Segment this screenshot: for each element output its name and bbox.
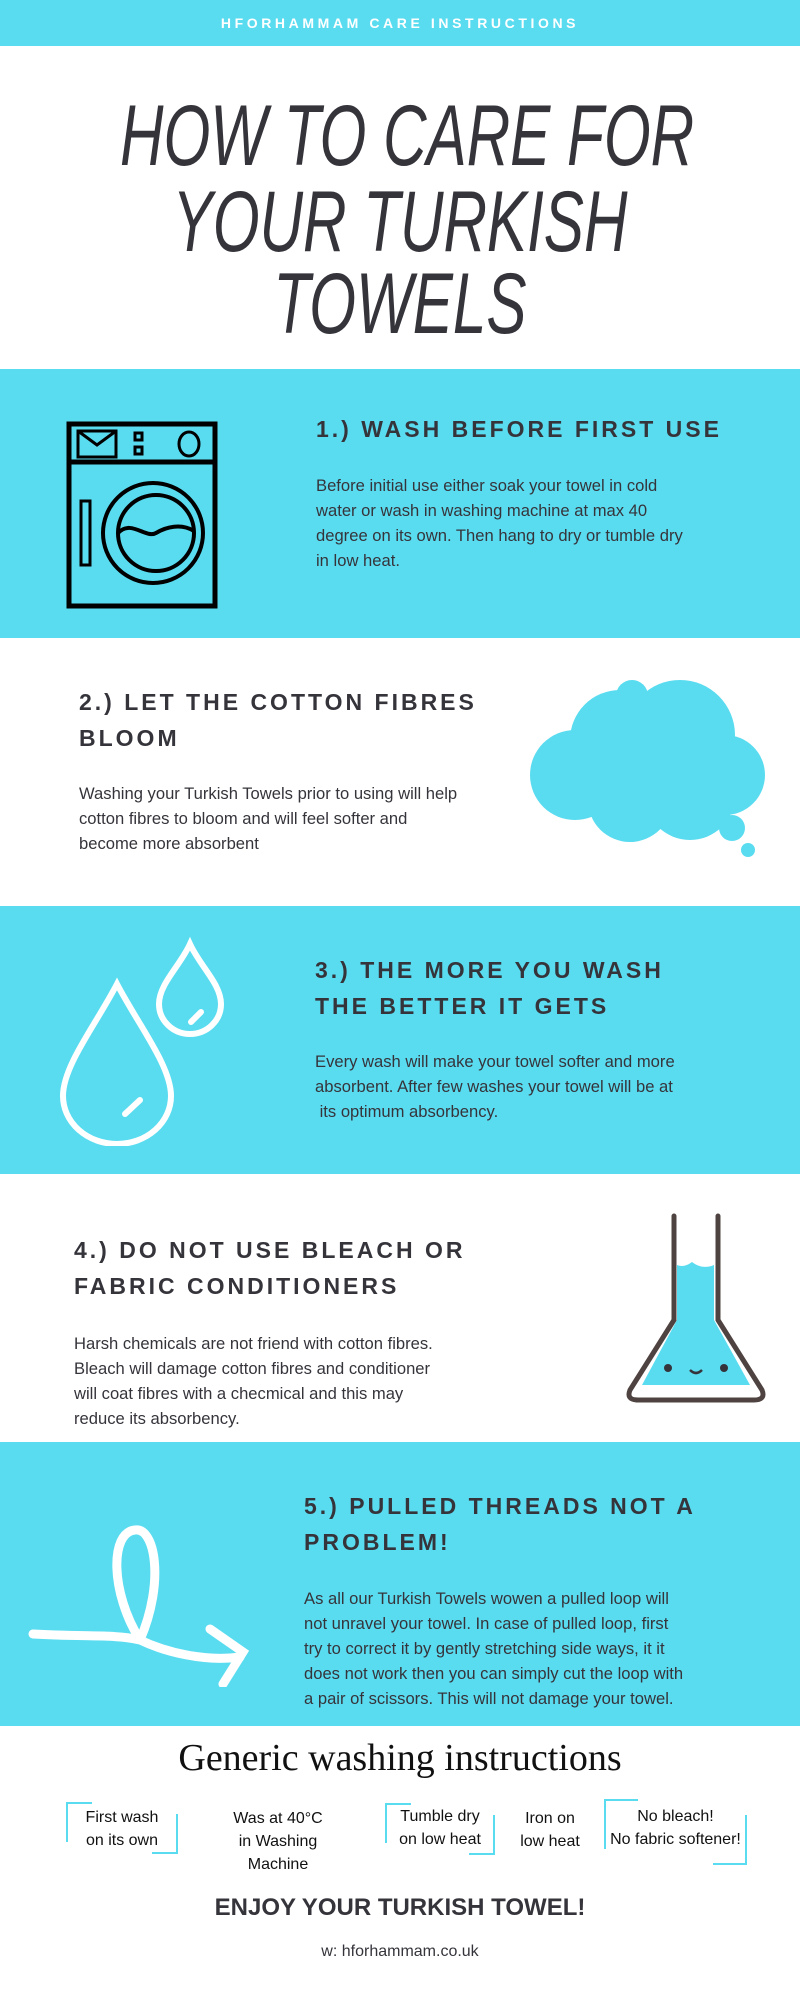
text 3 (315, 1052, 675, 1121)
text 1: Before initial use either soak your towel in cold (316, 476, 657, 495)
instruction: tumble dry (385, 1803, 495, 1855)
text 5: try to correct it by gently stretching side ways, it it (304, 1639, 665, 1658)
text 5: a pair of scissors. This will not damage your towel. (304, 1689, 674, 1708)
heading 3: THE BETTER IT GETS (315, 993, 609, 1019)
text 1: in low heat. (316, 551, 400, 570)
text 2: Washing your Turkish Towels prior to using will help (79, 784, 457, 803)
text 2: become more absorbent (79, 834, 259, 853)
heading 4: 4.) DO NOT USE BLEACH OR (74, 1237, 465, 1263)
text 4 (74, 1334, 433, 1428)
heading 2 (79, 689, 477, 751)
panel: section 5 (0, 1442, 800, 1726)
top bar (0, 0, 800, 46)
text 1: degree on its own. Then hang to dry or tumble dry (316, 526, 683, 545)
instruction: iron: Iron on (525, 1810, 575, 1827)
text 4: Bleach will damage cotton fibres and conditioner (74, 1359, 430, 1378)
text 2 (79, 784, 457, 853)
generic heading: Generic washing instructions (178, 1737, 622, 1779)
title: YOUR TURKISH (173, 174, 627, 270)
text 5 (304, 1589, 683, 1708)
instruction: iron (520, 1810, 580, 1850)
panel: section 3 (0, 906, 800, 1174)
panel: section 1 (0, 369, 800, 638)
instruction: wash at 40: Machine (248, 1856, 308, 1873)
icon: water drops (60, 936, 224, 1146)
title (120, 88, 694, 352)
heading 5 (304, 1493, 696, 1555)
text 5: does not work then you can simply cut the loop with (304, 1664, 683, 1683)
icon: washing machine (66, 422, 218, 608)
instruction: tumble dry: on low heat (399, 1831, 481, 1848)
text 4: Harsh chemicals are not friend with cotton fibres. (74, 1334, 433, 1353)
heading 3: 3.) THE MORE YOU WASH (315, 957, 664, 983)
heading 2: 2.) LET THE COTTON FIBRES (79, 689, 477, 715)
text 1: water or wash in washing machine at max 40 (316, 501, 647, 520)
text 3: absorbent. After few washes your towel will be at (315, 1077, 673, 1096)
instruction: wash at 40: in Washing (239, 1833, 317, 1850)
enjoy text: ENJOY YOUR TURKISH TOWEL! (215, 1894, 585, 1921)
heading 3 (315, 957, 664, 1019)
icon: ribbon arrow (28, 1525, 249, 1687)
instruction: wash at 40 (233, 1810, 323, 1873)
text 4: reduce its absorbency. (74, 1409, 240, 1428)
instruction: iron: low heat (520, 1833, 580, 1850)
heading 4: FABRIC CONDITIONERS (74, 1273, 399, 1299)
text 5: not unravel your towel. In case of pulled loop, first (304, 1614, 668, 1633)
text 5: As all our Turkish Towels wowen a pulled loop will (304, 1589, 669, 1608)
instruction: first wash: First wash (86, 1809, 158, 1826)
instruction: no bleach (604, 1799, 747, 1865)
title: TOWELS (273, 256, 527, 352)
text 3: its optimum absorbency. (320, 1102, 498, 1121)
heading 5: 5.) PULLED THREADS NOT A (304, 1493, 696, 1519)
heading 4 (74, 1237, 465, 1299)
instruction: first wash (66, 1802, 178, 1854)
instruction: tumble dry: Tumble dry (400, 1808, 480, 1825)
top bar: HFORHAMMAM CARE INSTRUCTIONS (221, 15, 579, 31)
heading 5: PROBLEM! (304, 1529, 451, 1555)
instruction: no bleach: No bleach! (637, 1808, 714, 1825)
heading 2: BLOOM (79, 725, 180, 751)
instruction: wash at 40: Was at 40°C (233, 1810, 323, 1827)
text 4: will coat fibres with a checmical and this may (74, 1384, 403, 1403)
text 3: Every wash will make your towel softer and more (315, 1052, 675, 1071)
instruction: no bleach: No fabric softener! (610, 1831, 741, 1848)
text 1 (316, 476, 683, 570)
heading 1: 1.) WASH BEFORE FIRST USE (316, 416, 722, 442)
title: HOW TO CARE FOR (120, 88, 694, 184)
icon: flask (626, 1214, 766, 1402)
text 2: cotton fibres to bloom and will feel softer and (79, 809, 407, 828)
icon: cloud (530, 680, 765, 857)
instruction: first wash: on its own (86, 1832, 158, 1849)
website: w: hforhammam.co.uk (321, 1943, 479, 1960)
